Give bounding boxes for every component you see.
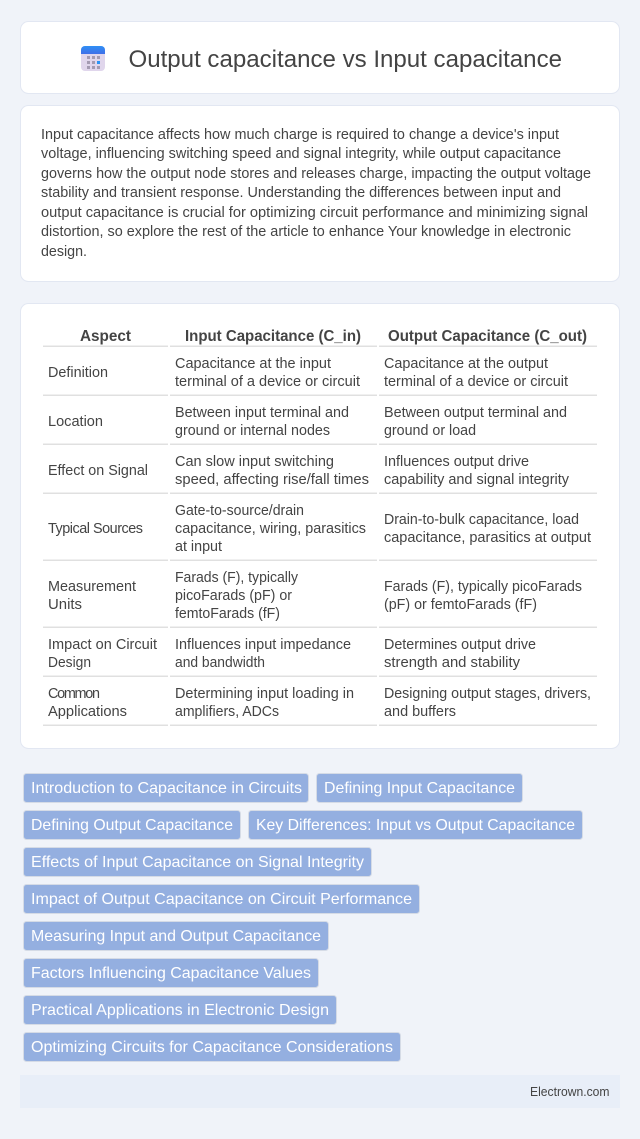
row: typical sources	[48, 503, 591, 555]
row: common applications: amplifiers, ADCs	[175, 704, 279, 720]
row: definition: Capacitance at the output	[384, 356, 548, 372]
row: effect on signal: Can slow input switching	[175, 454, 334, 470]
row: definition: Capacitance at the input	[175, 356, 331, 372]
row: typical sources: Drain-to-bulk capacitance, load	[384, 512, 579, 528]
row: definition: terminal of a device or circuit	[384, 374, 568, 390]
panel: description: output capacitance is crucial for optimizing circuit performance and minimizing signal	[41, 205, 588, 221]
row: impact on circuit design: Determines output drive	[384, 637, 536, 653]
tag: measuring: Measuring Input and Output Capacitance	[31, 928, 321, 945]
row: common applications: Common	[48, 686, 100, 702]
row: measurement units: Units	[48, 597, 82, 613]
row: location: ground or load	[384, 423, 476, 439]
row: impact on circuit design: strength and stability	[384, 655, 521, 671]
tag: impact	[24, 884, 420, 914]
row: common applications: and buffers	[384, 704, 456, 720]
row: common applications	[48, 686, 591, 720]
tag: optimizing: Optimizing Circuits for Capacitance Considerations	[31, 1039, 393, 1056]
row: typical sources: at input	[175, 539, 222, 555]
row: measurement units: femtoFarads (fF)	[175, 606, 280, 622]
tag: defining output: Defining Output Capacitance	[31, 817, 233, 834]
row: definition	[48, 356, 568, 390]
row: location: Between output terminal and	[384, 405, 567, 421]
row: impact on circuit design: Impact on Circuit	[48, 637, 157, 653]
row: impact on circuit design: Influences input impedance	[175, 637, 351, 653]
panel: description	[20, 106, 620, 282]
row: definition: terminal of a device or circuit	[175, 374, 360, 390]
row: impact on circuit design: and bandwidth	[175, 655, 265, 671]
tag: effects	[24, 848, 372, 876]
panel: description: governs how the output node stores and releases charge, impacting the output voltage	[41, 166, 591, 182]
row: effect on signal	[48, 454, 570, 488]
row: measurement units	[48, 570, 582, 622]
row: location: ground or internal nodes	[175, 423, 330, 439]
panel: description: design.	[41, 244, 87, 260]
footer	[20, 1075, 620, 1108]
icon: calendar grid	[81, 46, 105, 71]
tag: key differences: Key Differences: Input vs Output Capacitance	[256, 817, 575, 834]
table header row: Aspect	[80, 328, 131, 345]
row: location: Location	[48, 414, 103, 430]
row: location	[48, 405, 567, 439]
tag: defining output	[24, 810, 240, 840]
row: impact on circuit design	[48, 637, 536, 671]
footer: Electrown.com	[530, 1085, 610, 1099]
tag: introduction: Introduction to Capacitance in Circuits	[31, 780, 302, 797]
topic tags	[24, 774, 582, 1062]
tag: key differences	[248, 810, 582, 840]
title: Output capacitance vs Input capacitance	[128, 46, 562, 73]
table header row: Input Capacitance (C_in)	[185, 328, 361, 345]
row: measurement units: picoFarads (pF) or	[175, 588, 292, 604]
row: measurement units: (pF) or femtoFarads (fF)	[384, 597, 537, 613]
row: typical sources: capacitance, wiring, parasitics	[175, 521, 366, 537]
row: common applications: Designing output stages, drivers,	[384, 686, 591, 702]
row: impact on circuit design: Design	[48, 655, 91, 671]
tag: measuring	[24, 922, 328, 950]
row: measurement units: Measurement	[48, 579, 136, 595]
row: common applications: Applications	[48, 704, 127, 720]
row: location: Between input terminal and	[175, 405, 349, 421]
tag: defining input: Defining Input Capacitance	[324, 780, 515, 797]
panel: description: voltage, influencing switching speed and signal integrity, while output capacitance	[41, 146, 561, 162]
row: definition: Definition	[48, 365, 108, 381]
tag: effects: Effects of Input Capacitance on Signal Integrity	[31, 854, 364, 871]
row: common applications: Determining input loading in	[175, 686, 354, 702]
row: effect on signal: Effect on Signal	[48, 463, 148, 479]
panel: description: Input capacitance affects how much charge is required to change a device's input	[41, 127, 559, 143]
tag: factors: Factors Influencing Capacitance Values	[31, 965, 311, 982]
tag: factors	[24, 958, 318, 988]
tag: practical: Practical Applications in Electronic Design	[31, 1002, 329, 1019]
row: effect on signal: speed, affecting rise/fall times	[175, 472, 369, 488]
row: effect on signal: Influences output drive	[384, 454, 529, 470]
panel: comparison table	[20, 304, 620, 748]
table header row: Output Capacitance (C_out)	[388, 328, 587, 345]
table header row	[80, 328, 587, 345]
row: effect on signal: capability and signal integrity	[384, 472, 570, 488]
row: measurement units: Farads (F), typically picoFarads	[384, 579, 582, 595]
row: measurement units: Farads (F), typically	[175, 570, 299, 586]
row: typical sources: Typical Sources	[48, 521, 143, 537]
row: typical sources: capacitance, parasitics at output	[384, 530, 591, 546]
tag: introduction	[24, 774, 308, 802]
panel: description: distortion, so explore the rest of the article to enhance Your knowledge in electronic	[41, 224, 571, 240]
tag: defining input	[316, 774, 522, 802]
row: typical sources: Gate-to-source/drain	[175, 503, 304, 519]
panel: description: stability and transient response. Understanding the differences between input and	[41, 185, 561, 201]
tag: impact: Impact of Output Capacitance on Circuit Performance	[31, 891, 412, 908]
tag: practical	[24, 996, 336, 1024]
tag: optimizing	[24, 1032, 400, 1062]
header card	[20, 22, 620, 94]
